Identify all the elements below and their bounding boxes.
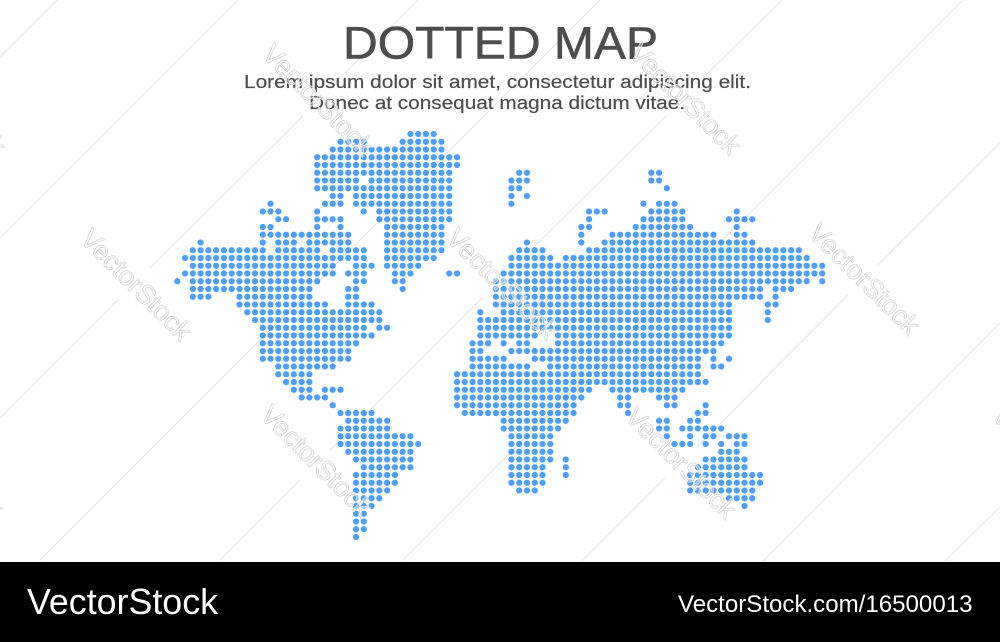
footer brand name: VectorStock <box>27 581 219 622</box>
watermarks: VectorStock <box>256 38 380 162</box>
subtitle text block <box>244 71 751 113</box>
dotted world map <box>177 134 822 537</box>
watermarks: VectorStock <box>802 217 926 341</box>
watermarks: VectorStock <box>440 222 564 346</box>
footer bar <box>0 562 1000 642</box>
south america dots <box>340 413 418 537</box>
subtitle text block: Donec at consequat magna dictum vitae. <box>309 92 685 113</box>
watermarks <box>0 37 1000 525</box>
watermarks: VectorStock <box>254 399 378 523</box>
subtitle text block: Lorem ipsum dolor sit amet, consectetur adipiscing elit. <box>244 71 751 92</box>
southeast asia and australia dots <box>659 405 760 506</box>
watermarks: VectorStock <box>619 401 743 525</box>
watermarks: VectorStock <box>623 37 747 161</box>
north america and greenland dots <box>177 134 457 405</box>
footer image id: VectorStock.com/16500013 <box>678 591 972 618</box>
watermarks: VectorStock <box>74 223 198 347</box>
europe, asia and africa dots <box>457 173 822 490</box>
title: DOTTED MAP <box>343 17 658 68</box>
